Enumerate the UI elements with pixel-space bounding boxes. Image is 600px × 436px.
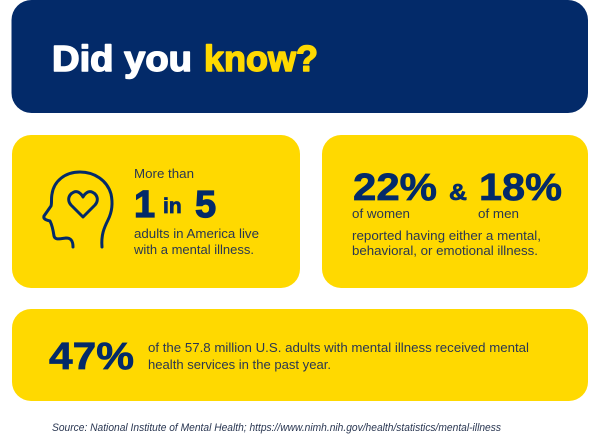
stat: 47%: 47% (49, 336, 134, 378)
stat: 18% of men: of men (478, 206, 519, 221)
stat: 18% of men: 18% (479, 167, 562, 209)
stat: 22% of women (352, 167, 437, 221)
stat: 1 in 5: 1 (134, 184, 155, 226)
panel: women and men: behavioral, or emotional illness. (352, 243, 538, 258)
text: adults in America: adults in America live (134, 226, 259, 241)
icon: head with heart (44, 172, 112, 247)
panel: header (12, 0, 588, 113)
stat: 22% of women: 22% (353, 167, 437, 209)
title: know? (204, 38, 318, 79)
stat: 1 in 5 (134, 184, 216, 226)
stat: 1 in 5: 5 (195, 184, 216, 226)
panel: women and men (322, 135, 588, 288)
panel: 1 in 5 adults (12, 135, 300, 288)
text: services: of the 57.8 million U.S. adults with mental illness received mental (148, 340, 529, 355)
title: Did you (52, 38, 192, 79)
title (52, 38, 318, 79)
stat: 1 in 5: in (163, 195, 182, 218)
panel: 47 percent: health services in the past year. (148, 357, 331, 372)
stat: 22% of women: of women (352, 206, 410, 221)
panel: 1 in 5 adults: with a mental illness. (133, 242, 254, 257)
panel: 47 percent (12, 309, 588, 401)
text: more than: More than (134, 166, 194, 181)
text: reported illness: reported having either a mental, (352, 228, 541, 243)
ampersand: & (449, 179, 467, 205)
source: Source: National Institute of Mental Health; https://www.nimh.nih.gov/health/statistics/mental-illness (52, 422, 502, 434)
